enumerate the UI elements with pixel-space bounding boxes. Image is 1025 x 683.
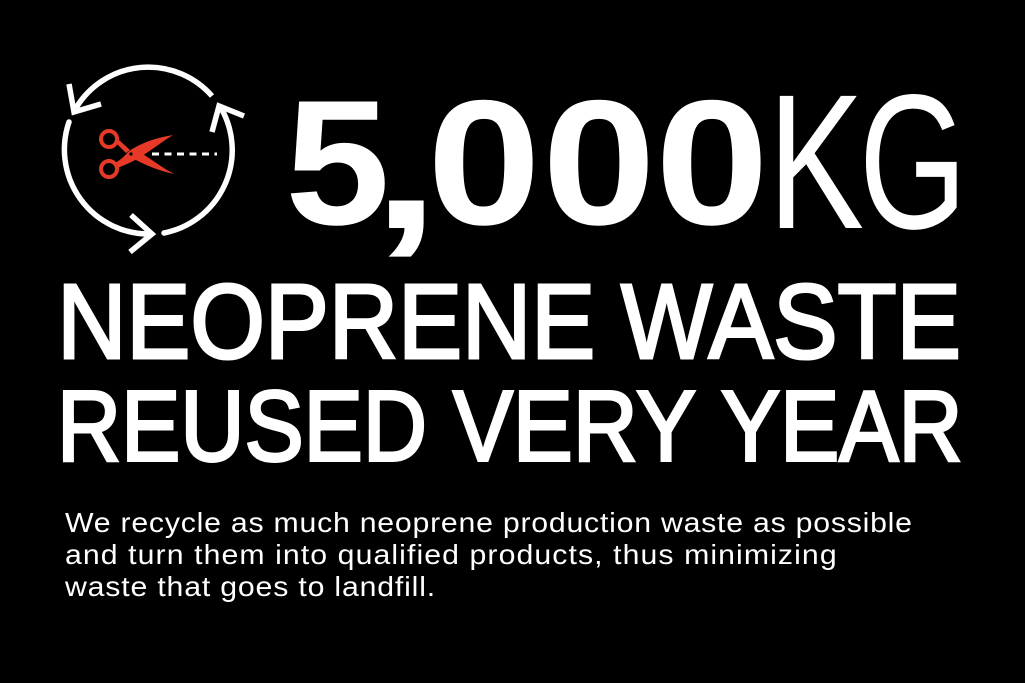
- headline number: 5: [285, 63, 390, 262]
- heading line 2: [57, 370, 962, 482]
- description text: We recycle as much neoprene production waste as possible: [65, 508, 912, 539]
- headline unit: [768, 54, 967, 269]
- icon: recycling circle with scissors: [64, 67, 244, 252]
- icon: scissors: [101, 131, 174, 177]
- headline number: 0: [655, 63, 769, 262]
- heading line 2: VERY: [453, 370, 696, 482]
- headline number: [285, 62, 769, 268]
- heading line 2: YEAR: [721, 370, 962, 482]
- headline number: 0: [542, 63, 656, 262]
- description text: and turn them into qualified products, thus minimizing: [65, 540, 837, 571]
- description text: waste that goes to landfill.: [64, 572, 435, 603]
- description text: [64, 508, 912, 603]
- heading line 1: [57, 263, 961, 381]
- heading line 1: WASTE: [621, 263, 961, 381]
- dashed cut line: [152, 152, 217, 156]
- headline unit: K: [768, 54, 864, 269]
- heading line 1: NEOPRENE: [57, 263, 595, 381]
- heading line 2: REUSED: [57, 370, 427, 482]
- icon: circular arrows: [64, 67, 244, 252]
- headline unit: G: [859, 54, 967, 269]
- headline number: ,: [372, 62, 440, 268]
- headline number: 0: [427, 63, 541, 262]
